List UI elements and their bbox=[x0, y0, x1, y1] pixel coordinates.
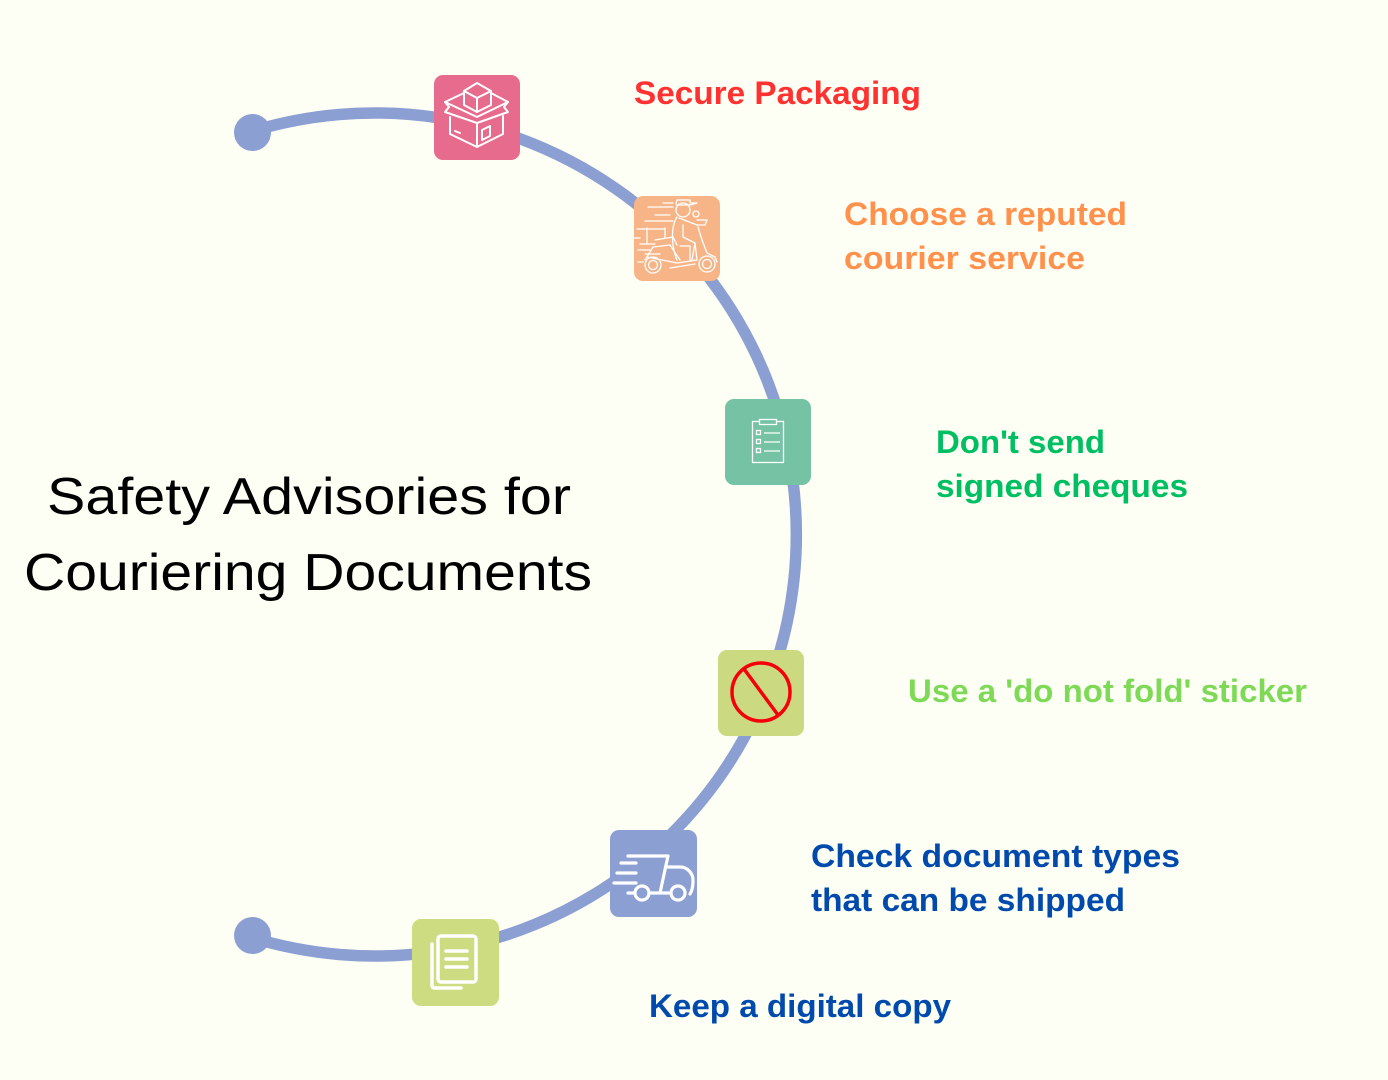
label: choose a reputed courier service: courier service bbox=[844, 240, 1085, 276]
title: Couriering Documents bbox=[24, 544, 592, 602]
icon: checklist clipboard bbox=[725, 399, 811, 485]
icon: prohibition sign bbox=[718, 650, 804, 736]
label: don't send signed cheques: Don't send bbox=[936, 424, 1105, 460]
icon: delivery truck bbox=[610, 830, 697, 917]
icon: document copies bbox=[412, 919, 499, 1006]
label: choose a reputed courier service: Choose a reputed bbox=[844, 196, 1127, 232]
icon: courier on scooter bbox=[634, 196, 720, 281]
label: keep a digital copy: Keep a digital copy bbox=[649, 988, 951, 1024]
label: choose a reputed courier service bbox=[844, 196, 1127, 276]
timeline arc bbox=[234, 113, 796, 956]
label: check document types: that can be shipped bbox=[811, 882, 1125, 918]
title bbox=[24, 468, 592, 602]
label: check document types: Check document types bbox=[811, 838, 1180, 874]
icon: package box bbox=[434, 75, 520, 160]
label: don't send signed cheques bbox=[936, 424, 1188, 504]
label: don't send signed cheques: signed cheques bbox=[936, 468, 1188, 504]
title: Safety Advisories for bbox=[47, 468, 571, 526]
label: check document types bbox=[811, 838, 1180, 918]
label: secure packaging: Secure Packaging bbox=[634, 75, 921, 111]
label: do not fold sticker: Use a 'do not fold' sticker bbox=[908, 673, 1307, 709]
